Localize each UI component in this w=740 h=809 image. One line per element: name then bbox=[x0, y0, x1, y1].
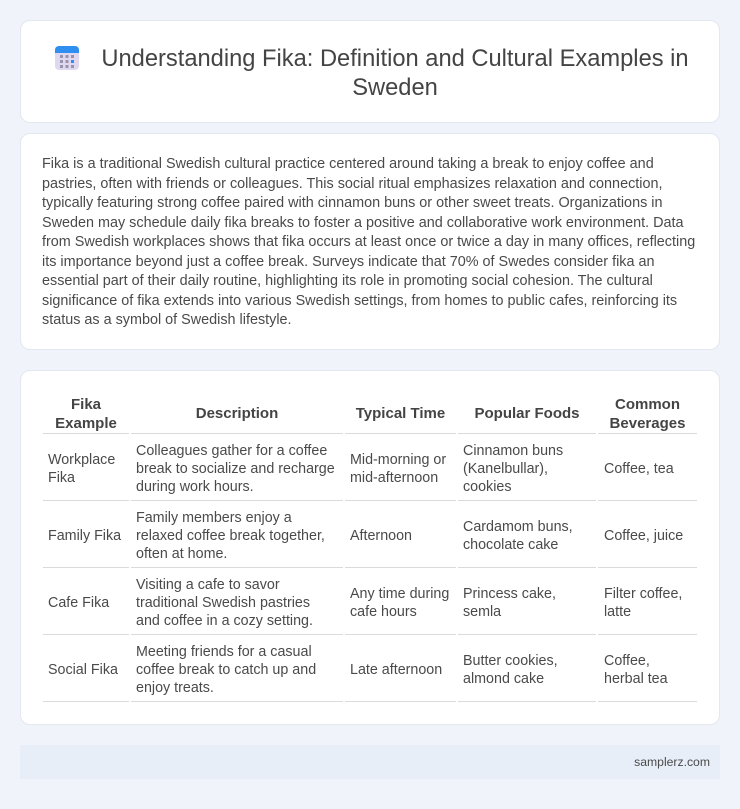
row: Cafe Fika: latte bbox=[604, 604, 631, 620]
row: Workplace Fika: Workplace bbox=[48, 452, 115, 468]
table header bbox=[55, 396, 685, 432]
row: Workplace Fika: Colleagues gather for a coffee bbox=[136, 443, 327, 459]
title: Sweden bbox=[352, 75, 438, 101]
intro paragraph: typically featuring strong coffee paired with cinnamon buns or other sweet treats. Organizations in bbox=[42, 195, 662, 211]
table header: Popular Foods bbox=[474, 405, 580, 422]
row: Cafe Fika bbox=[48, 577, 682, 629]
row: Workplace Fika: during work hours. bbox=[136, 479, 254, 495]
row: Social Fika: Coffee, bbox=[604, 653, 650, 669]
row: Workplace Fika: break to socialize and recharge bbox=[136, 461, 335, 477]
table header: Description bbox=[196, 405, 278, 422]
intro paragraph: pastries, often with friends or colleagues. This social ritual emphasizes relaxation and connection, bbox=[42, 176, 662, 192]
table header: Beverages bbox=[610, 415, 685, 432]
footer text: samplerz.com bbox=[634, 755, 710, 769]
row: Workplace Fika: Mid-morning or bbox=[350, 452, 446, 468]
row: Social Fika: enjoy treats. bbox=[136, 680, 214, 696]
table card bbox=[20, 370, 720, 725]
intro paragraph: essential part of their daily routine, highlighting its role in promoting social cohesion. The cultural bbox=[42, 273, 653, 289]
title bbox=[101, 46, 689, 101]
intro paragraph bbox=[42, 156, 695, 328]
table header: Example bbox=[55, 415, 117, 432]
row: Family Fika: chocolate cake bbox=[463, 537, 558, 553]
row: Family Fika: Cardamom buns, bbox=[463, 519, 573, 535]
row: Family Fika: relaxed coffee break together, bbox=[136, 528, 325, 544]
row: Family Fika bbox=[48, 510, 683, 562]
intro paragraph: its importance beyond just a coffee break. Surveys indicate that 70% of Swedes consider fika an bbox=[42, 254, 654, 270]
row: Social Fika: Butter cookies, bbox=[463, 653, 558, 669]
intro paragraph: status as a symbol of Swedish lifestyle. bbox=[42, 312, 292, 328]
row: Workplace Fika bbox=[48, 443, 674, 495]
row: Cafe Fika: cafe hours bbox=[350, 604, 417, 620]
row: Workplace Fika: (Kanelbullar), bbox=[463, 461, 548, 477]
row: Social Fika: herbal tea bbox=[604, 671, 668, 687]
row: Cafe Fika: semla bbox=[463, 604, 501, 620]
row: Cafe Fika: and coffee in a cozy setting. bbox=[136, 613, 313, 629]
row: Social Fika: coffee break to catch up and bbox=[136, 662, 316, 678]
row: Workplace Fika: Cinnamon buns bbox=[463, 443, 563, 459]
row: Social Fika bbox=[48, 644, 668, 696]
intro card bbox=[20, 133, 720, 350]
row: Family Fika: Family members enjoy a bbox=[136, 510, 292, 526]
row: Cafe Fika: Filter coffee, bbox=[604, 586, 682, 602]
table header: Fika bbox=[71, 396, 101, 413]
icon: calendar bbox=[55, 46, 79, 70]
row: Cafe Fika: traditional Swedish pastries bbox=[136, 595, 310, 611]
header card bbox=[20, 20, 720, 123]
row: Social Fika: almond cake bbox=[463, 671, 544, 687]
row: Social Fika: Meeting friends for a casual bbox=[136, 644, 312, 660]
footer bbox=[20, 745, 720, 779]
row: Family Fika: Afternoon bbox=[350, 528, 412, 544]
intro paragraph: significance of fika extends into various Swedish settings, from homes to public cafes, reinforcing its bbox=[42, 292, 677, 308]
row: Workplace Fika: Coffee, tea bbox=[604, 461, 674, 477]
table header: Common bbox=[615, 396, 680, 413]
title: Understanding Fika: Definition and Cultural Examples in bbox=[101, 46, 689, 72]
row: Workplace Fika: Fika bbox=[48, 470, 75, 486]
intro paragraph: Fika is a traditional Swedish cultural practice centered around taking a break to enjoy coffee and bbox=[42, 156, 654, 172]
row: Family Fika: Coffee, juice bbox=[604, 528, 683, 544]
row: Workplace Fika: cookies bbox=[463, 479, 511, 495]
intro paragraph: from Swedish workplaces shows that fika occurs at least once or twice a day in many offices, reflecting bbox=[42, 234, 695, 250]
table header: Typical Time bbox=[356, 405, 445, 422]
row: Family Fika: often at home. bbox=[136, 546, 227, 562]
row: Social Fika: Social Fika bbox=[48, 662, 118, 678]
row: Cafe Fika: Visiting a cafe to savor bbox=[136, 577, 280, 593]
row: Cafe Fika: Any time during bbox=[350, 586, 449, 602]
row: Family Fika: Family Fika bbox=[48, 528, 121, 544]
row: Workplace Fika: mid-afternoon bbox=[350, 470, 438, 486]
row: Cafe Fika: Princess cake, bbox=[463, 586, 556, 602]
row: Cafe Fika: Cafe Fika bbox=[48, 595, 109, 611]
intro paragraph: Sweden may schedule daily fika breaks to foster a positive and collaborative work environment. Data bbox=[42, 214, 684, 230]
row: Social Fika: Late afternoon bbox=[350, 662, 442, 678]
